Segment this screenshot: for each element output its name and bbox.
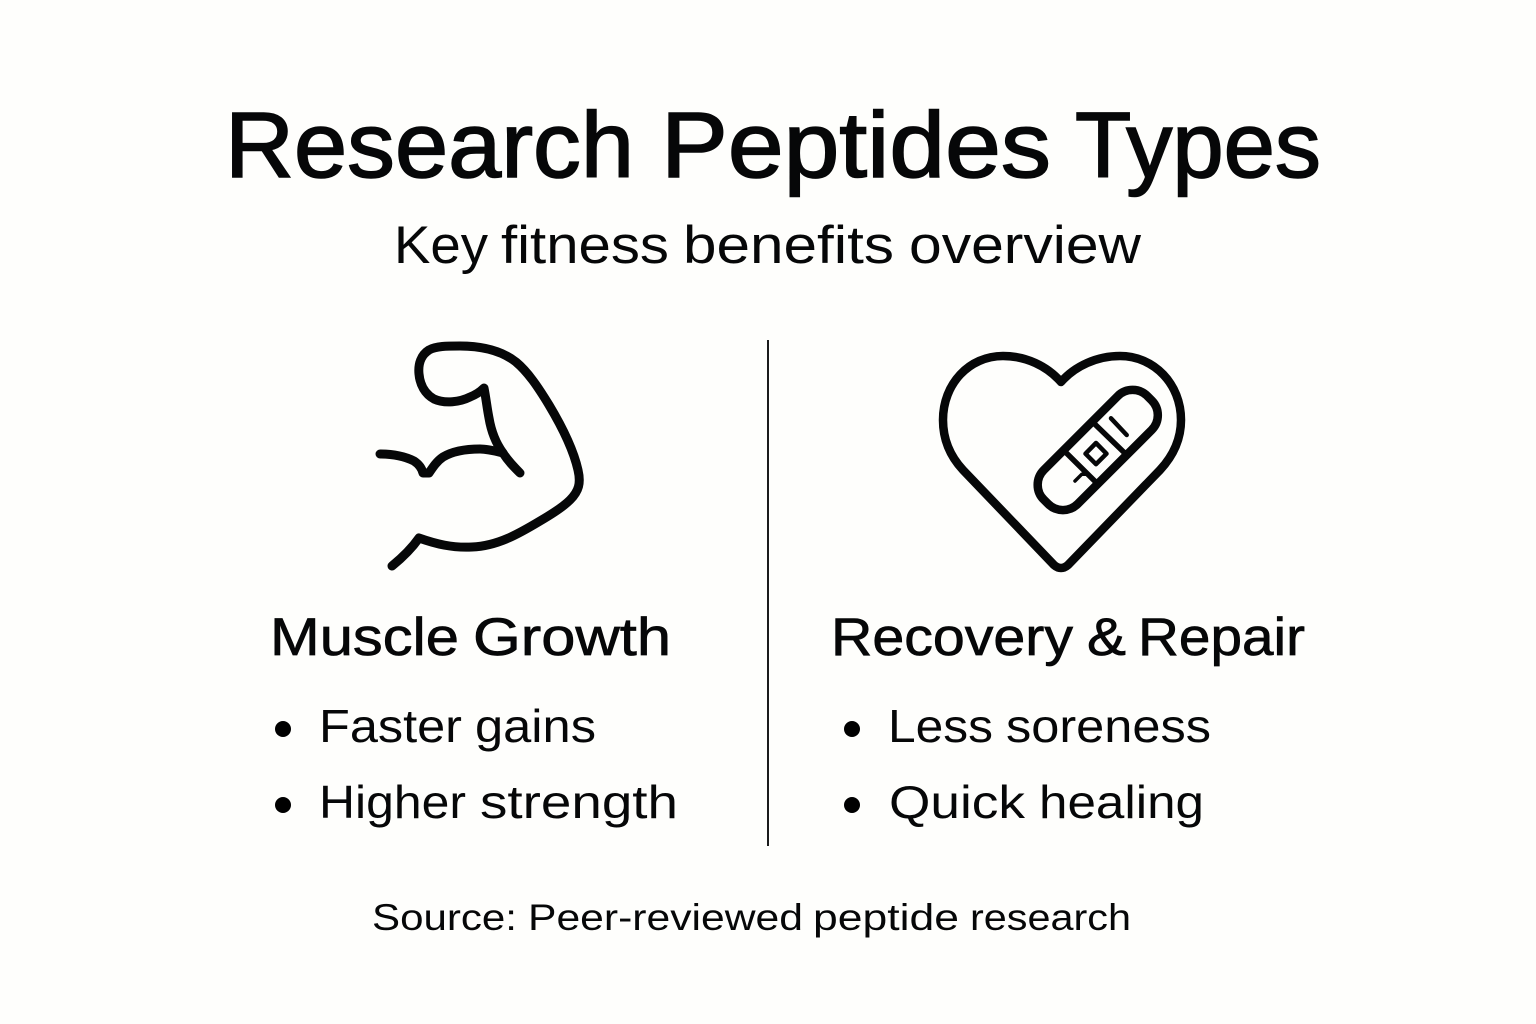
bullet list: recovery and repair xyxy=(844,700,1211,828)
bullet list: recovery and repair: soreness xyxy=(1006,700,1211,752)
source note: Source: xyxy=(372,897,517,938)
title: Types xyxy=(1075,93,1321,197)
heading: recovery and repair xyxy=(831,608,1305,667)
divider line xyxy=(767,340,769,846)
title: Peptides xyxy=(661,93,1051,197)
panel: muscle growth xyxy=(270,346,678,828)
bullet list: recovery and repair: Less xyxy=(888,700,993,752)
source note xyxy=(372,897,1131,938)
subtitle: benefits xyxy=(683,216,894,275)
subtitle: Key xyxy=(394,216,489,275)
bullet list: muscle growth: strength xyxy=(480,776,678,828)
bullet list: muscle growth xyxy=(275,700,678,828)
icon: flexed arm xyxy=(380,346,579,566)
source note: Peer-reviewed xyxy=(528,897,803,938)
source note: peptide xyxy=(813,897,959,938)
bullet list: recovery and repair: healing xyxy=(1039,776,1204,828)
panel: recovery and repair xyxy=(831,356,1305,828)
title xyxy=(225,93,1321,197)
subtitle: overview xyxy=(909,216,1142,275)
bullet list: muscle growth: gains xyxy=(475,700,596,752)
subtitle: fitness xyxy=(501,216,669,275)
heading: recovery and repair: Repair xyxy=(1138,608,1305,667)
source note: research xyxy=(970,897,1131,938)
subtitle xyxy=(394,216,1142,275)
heading: recovery and repair: & xyxy=(1087,608,1126,667)
bullet list: recovery and repair: Quick xyxy=(889,776,1026,828)
heading: recovery and repair: Recovery xyxy=(831,608,1074,667)
heading: muscle growth: Muscle xyxy=(270,608,459,667)
icon: heart with bandage xyxy=(943,356,1181,568)
title: Research xyxy=(225,93,634,197)
heading: muscle growth: Growth xyxy=(473,608,671,667)
heading: muscle growth xyxy=(270,608,671,667)
bullet list: muscle growth: Higher xyxy=(319,776,466,828)
bullet list: muscle growth: Faster xyxy=(319,700,462,752)
